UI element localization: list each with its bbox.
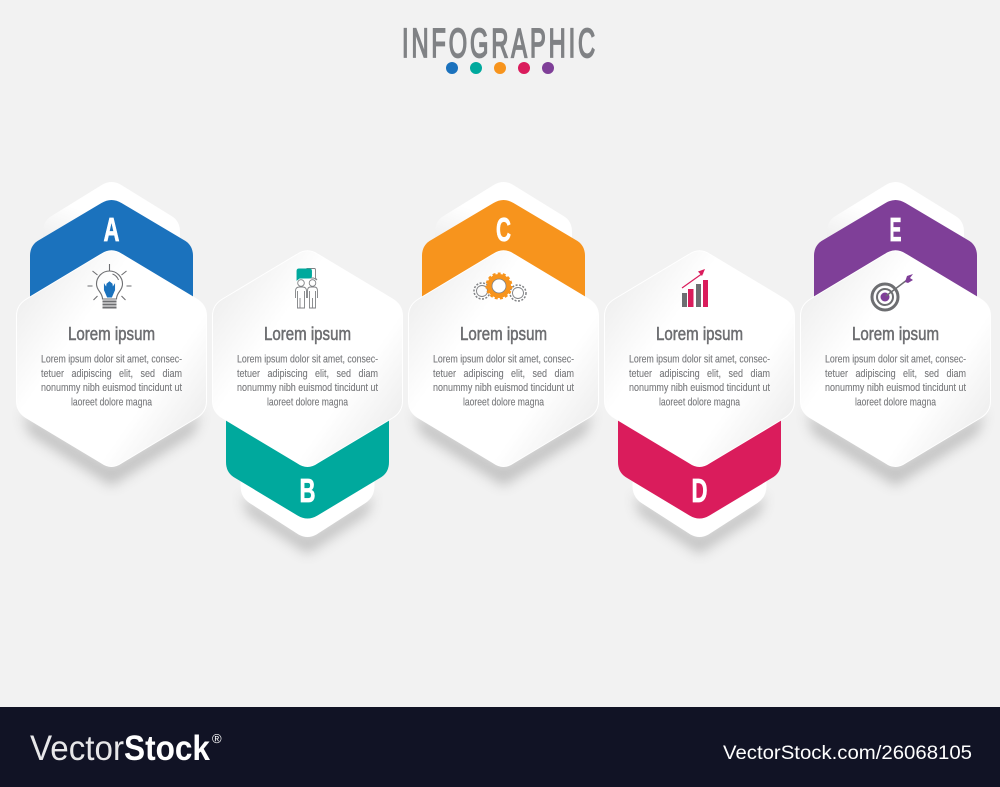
panel: E [800,182,990,486]
heading: Lorem ipsum [852,323,939,344]
text block [237,354,378,408]
icon: people with speech bubbles [296,268,318,308]
heading: Lorem ipsum [68,323,155,344]
logo: Stock [124,729,210,768]
text block: nonummy nibh euismod tincidunt ut [41,382,182,394]
text block: Lorem ipsum dolor sit amet, consec- [237,354,378,366]
text block [41,354,182,408]
text block: Lorem ipsum dolor sit amet, consec- [41,354,182,366]
text block [433,354,574,408]
text block: tetuer adipiscing elit, sed diam [629,368,770,380]
text block: nonummy nibh euismod tincidunt ut [629,382,770,394]
panel: C: C [496,211,511,248]
panel: A: A [104,211,120,248]
text block: tetuer adipiscing elit, sed diam [237,368,378,380]
panel: D [604,251,794,554]
text block: Lorem ipsum dolor sit amet, consec- [433,354,574,366]
panel: A [16,182,206,486]
heading: Lorem ipsum [460,323,547,344]
text block: Lorem ipsum dolor sit amet, consec- [825,354,966,366]
text block: nonummy nibh euismod tincidunt ut [433,382,574,394]
text block: tetuer adipiscing elit, sed diam [433,368,574,380]
panel: E: E [890,211,902,248]
panel: B [212,251,402,554]
text block: Lorem ipsum dolor sit amet, consec- [629,354,770,366]
title [402,20,598,74]
text block: laoreet dolore magna [659,396,741,408]
text block: nonummy nibh euismod tincidunt ut [237,382,378,394]
panel: C [408,182,598,486]
text block: nonummy nibh euismod tincidunt ut [825,382,966,394]
image id: VectorStock.com/26068105 [723,742,972,764]
icon: light bulb [88,264,132,308]
text block: laoreet dolore magna [267,396,349,408]
text block [825,354,966,408]
icon: gears [474,274,526,301]
text block: tetuer adipiscing elit, sed diam [41,368,182,380]
logo: ® [212,731,222,746]
colour dots [446,62,554,74]
footer bar [0,707,1000,787]
text block: laoreet dolore magna [463,396,545,408]
text block [629,354,770,408]
panel: D: D [692,472,708,509]
text block: laoreet dolore magna [855,396,937,408]
icon: target with arrow [872,274,913,310]
icon: bar chart with arrow [682,269,708,307]
heading: Lorem ipsum [264,323,351,344]
logo: Vector [30,729,124,768]
title: INFOGRAPHIC [402,20,598,66]
logo [30,729,222,768]
text block: tetuer adipiscing elit, sed diam [825,368,966,380]
heading: Lorem ipsum [656,323,743,344]
panel: B: B [300,472,316,509]
text block: laoreet dolore magna [71,396,153,408]
